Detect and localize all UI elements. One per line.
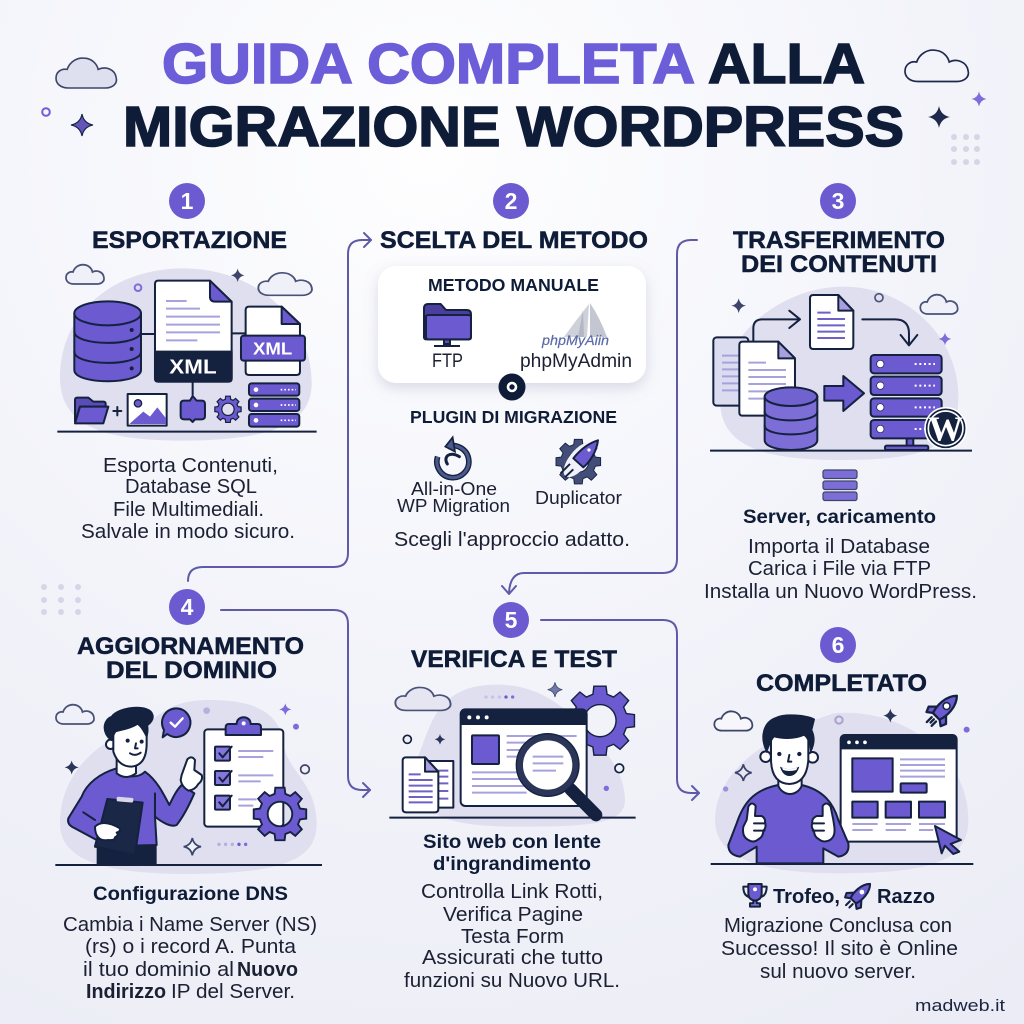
description 3: Importa il Database — [748, 536, 930, 558]
subheading 6: trophy and rocket: Trofeo, — [773, 886, 840, 908]
description 1: File Multimediali. — [113, 499, 264, 521]
arrow: step 1 to step 2 — [188, 233, 371, 581]
heading 3: DEI CONTENUTI — [741, 251, 937, 278]
number badge 3: 3 — [832, 188, 844, 214]
subheading 4: Configurazione DNS — [93, 884, 288, 905]
description 4: Indirizzo — [86, 981, 166, 1003]
number badge 4: 4 — [181, 594, 194, 620]
panel: step 3 trasferimento — [704, 183, 977, 603]
description 5 — [404, 881, 620, 992]
description 4: IP del Server. — [171, 981, 295, 1003]
arrow: step 5 to step 6 — [541, 620, 699, 800]
panel: step 1 esportazione — [57, 183, 317, 543]
number badge 5: 5 — [505, 607, 518, 633]
heading 3: TRASFERIMENTO — [733, 227, 945, 254]
icon: trophy — [743, 884, 767, 907]
description 3: Installa un Nuovo WordPress. — [704, 581, 977, 603]
subheading 6: trophy and rocket: Razzo — [877, 886, 935, 908]
number badge 1: 1 — [181, 188, 194, 214]
description 5: Testa Form — [461, 926, 564, 948]
icon: phpmyadmin logo: phpMyAiin — [541, 332, 609, 348]
description 3 — [704, 536, 977, 603]
heading 2: SCELTA DEL METODO — [380, 227, 648, 254]
title: GUIDA COMPLETA — [162, 32, 695, 95]
number badge 2: 2 — [505, 188, 517, 214]
title: MIGRAZIONE WORDPRESS — [123, 95, 904, 158]
subheading 5: Sito web con lente — [423, 832, 601, 853]
label ftp: FTP — [432, 351, 463, 372]
icon: ftp folder — [424, 304, 471, 346]
description 1: Salvale in modo sicuro. — [81, 521, 295, 543]
subheading 5: d'ingrandimento — [433, 854, 591, 875]
description 2: Scegli l'approccio adatto. — [394, 529, 630, 551]
title — [123, 32, 904, 158]
subheading 3: Server, caricamento — [743, 507, 936, 528]
description 4: il tuo dominio al — [83, 959, 234, 981]
subheading 5 — [423, 832, 601, 875]
description 6 — [721, 915, 958, 983]
icon: wordpress logo: W — [928, 411, 963, 449]
icon: rocket — [920, 687, 966, 733]
description 5: funzioni su Nuovo URL. — [404, 970, 620, 992]
illustration: browser with magnifier — [389, 682, 636, 827]
description 1: Database SQL — [125, 476, 257, 498]
description 6: sul nuovo server. — [760, 961, 916, 983]
description 1: Esporta Contenuti, — [103, 455, 278, 477]
number badge 6 — [820, 627, 856, 663]
icon: duplicator gear rocket — [556, 438, 601, 484]
description 4: Cambia i Name Server (NS) — [63, 914, 317, 936]
number badge 5 — [493, 602, 529, 638]
description 4: Nuovo — [237, 959, 298, 981]
description 5: Verifica Pagine — [443, 904, 583, 926]
description 5: Assicurati che tutto — [422, 947, 603, 969]
illustration: person with website — [711, 687, 973, 873]
number badge 4 — [169, 589, 205, 625]
heading: plugin di migrazione: PLUGIN DI MIGRAZIONE — [410, 407, 617, 427]
title: ALLA — [708, 32, 865, 95]
heading 1: ESPORTAZIONE — [92, 227, 287, 254]
heading 5: VERIFICA E TEST — [411, 646, 617, 673]
panel: step 6 completato — [711, 627, 973, 983]
description 4 — [63, 914, 317, 1003]
card: metodo manuale — [378, 266, 646, 383]
description 4: (rs) o i record A. Punta — [85, 936, 297, 958]
heading 4: DEL DOMINIO — [106, 657, 277, 684]
illustration: export — [57, 265, 317, 441]
icon: small rocket — [840, 877, 877, 914]
heading 6: COMPLETATO — [756, 670, 927, 697]
number badge 1 — [169, 183, 205, 219]
panel: step 2 scelta del metodo — [378, 183, 648, 551]
description 1 — [81, 455, 295, 543]
brand: madweb.it — [915, 996, 1005, 1015]
illustration: transfer — [710, 287, 972, 460]
header decorations — [41, 50, 986, 615]
icon: phpmyadmin logo — [541, 303, 609, 348]
heading 4: AGGIORNAMENTO — [77, 633, 304, 660]
description 6: Successo! Il sito è Online — [721, 938, 958, 960]
arrow: step 3 to step 5 — [502, 240, 697, 594]
panel: step 5 verifica e test — [389, 602, 636, 992]
arrow: step 4 to step 5 — [221, 610, 370, 797]
number badge 2 — [493, 183, 529, 219]
icon: all-in-one refresh — [437, 437, 469, 478]
heading 4 — [77, 633, 304, 684]
label all-in-one: WP Migration — [397, 496, 510, 516]
label all-in-one — [397, 479, 510, 516]
icon: mini server — [823, 470, 857, 500]
label all-in-one: All-in-One — [411, 479, 497, 499]
label phpmyadmin: phpMyAdmin — [520, 351, 632, 372]
description 6: Migrazione Conclusa con — [724, 915, 952, 937]
illustration: export: XML — [253, 338, 292, 358]
description 5: Controlla Link Rotti, — [421, 881, 603, 903]
panel: step 4 aggiornamento del dominio — [55, 589, 322, 1003]
subheading 6: trophy and rocket — [743, 877, 935, 914]
description 3: Carica i File via FTP — [748, 558, 931, 580]
card: metodo manuale: METODO MANUALE — [428, 275, 599, 295]
illustration: person with checklist — [55, 700, 322, 874]
label duplicator: Duplicator — [535, 488, 622, 508]
illustration: export: XML — [169, 356, 217, 378]
heading 3 — [733, 227, 945, 278]
badge: o — [498, 374, 526, 400]
number badge 3 — [820, 183, 856, 219]
number badge 6: 6 — [832, 632, 844, 658]
